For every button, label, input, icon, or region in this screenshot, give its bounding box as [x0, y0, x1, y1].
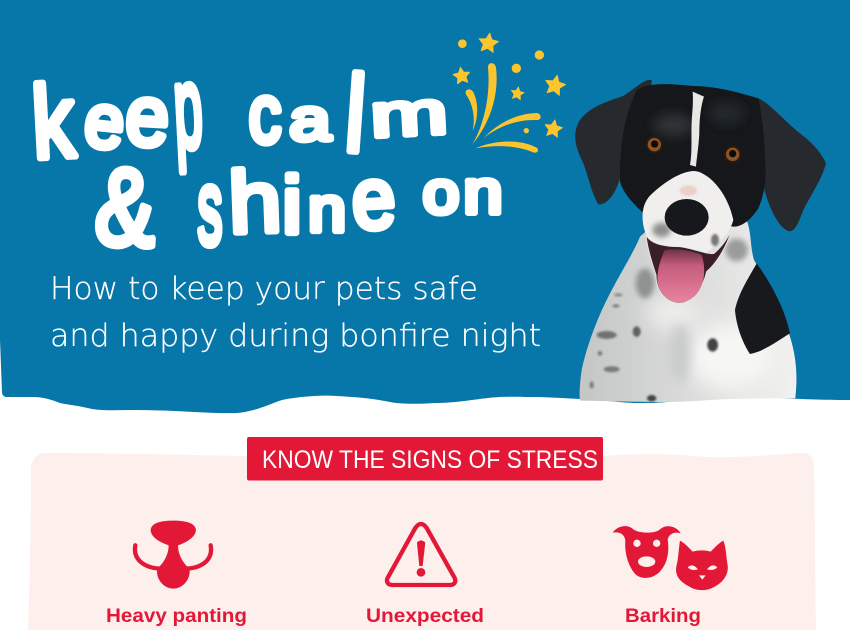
- title: keep calm & shine on: n: [308, 174, 346, 245]
- title: keep calm & shine on: m: [369, 78, 449, 150]
- dog mouth: [646, 229, 732, 303]
- dog left ear: [575, 80, 652, 204]
- dog muzzle: [643, 171, 733, 254]
- dog face: [613, 526, 681, 578]
- label: heavy panting: Heavy panting: [106, 606, 247, 627]
- title: keep calm & shine on: k: [29, 63, 77, 180]
- title: keep calm & shine on: e: [81, 78, 128, 166]
- title: keep calm & shine on: c: [249, 67, 281, 160]
- icon: heavy panting: [135, 521, 211, 589]
- panel: signs of stress: [28, 453, 816, 630]
- title: keep calm & shine on: o: [423, 160, 459, 226]
- dog black shoulder patch: [735, 263, 790, 354]
- dog head: [620, 84, 766, 227]
- dog eyes: [646, 136, 741, 163]
- title: keep calm & shine on: e: [349, 150, 397, 248]
- title: keep calm & shine on: &: [93, 146, 157, 270]
- banner: know the signs of stress: [247, 437, 603, 480]
- title: keep calm & shine on: a: [289, 87, 331, 153]
- title: keep calm & shine on: i: [282, 160, 302, 251]
- cat face: [676, 541, 728, 590]
- photo: dog: [575, 80, 826, 402]
- header panel: blue wavy background: [0, 0, 850, 413]
- title: keep calm & shine on: n: [463, 157, 503, 226]
- icon: warning triangle: [387, 524, 455, 585]
- title: keep calm & shine on: e: [124, 69, 171, 165]
- title: keep calm & shine on: p: [171, 43, 205, 172]
- dog right ear: [754, 98, 826, 231]
- subtitle: [50, 271, 541, 354]
- icon: dog and cat faces: [613, 526, 728, 590]
- title: keep calm & shine on: l: [342, 53, 369, 175]
- dog tongue: [657, 249, 704, 303]
- title: keep calm & shine on: h: [227, 153, 283, 252]
- subtitle: and happy during bonfire night: [50, 318, 541, 354]
- dog nose: [665, 199, 709, 236]
- title: keep calm & shine on: [29, 43, 503, 270]
- label: unexpected: Unexpected: [366, 606, 484, 627]
- icon: fireworks of stars and streaks: [452, 32, 567, 153]
- dog forehead blaze: [690, 92, 704, 167]
- title: keep calm & shine on: s: [198, 148, 222, 267]
- subtitle: How to keep your pets safe: [50, 271, 478, 307]
- dog body shading: [590, 239, 773, 402]
- label: barking: Barking: [625, 606, 701, 627]
- banner: know the signs of stress: KNOW THE SIGNS OF STRESS: [262, 446, 598, 474]
- dog body: [580, 210, 796, 402]
